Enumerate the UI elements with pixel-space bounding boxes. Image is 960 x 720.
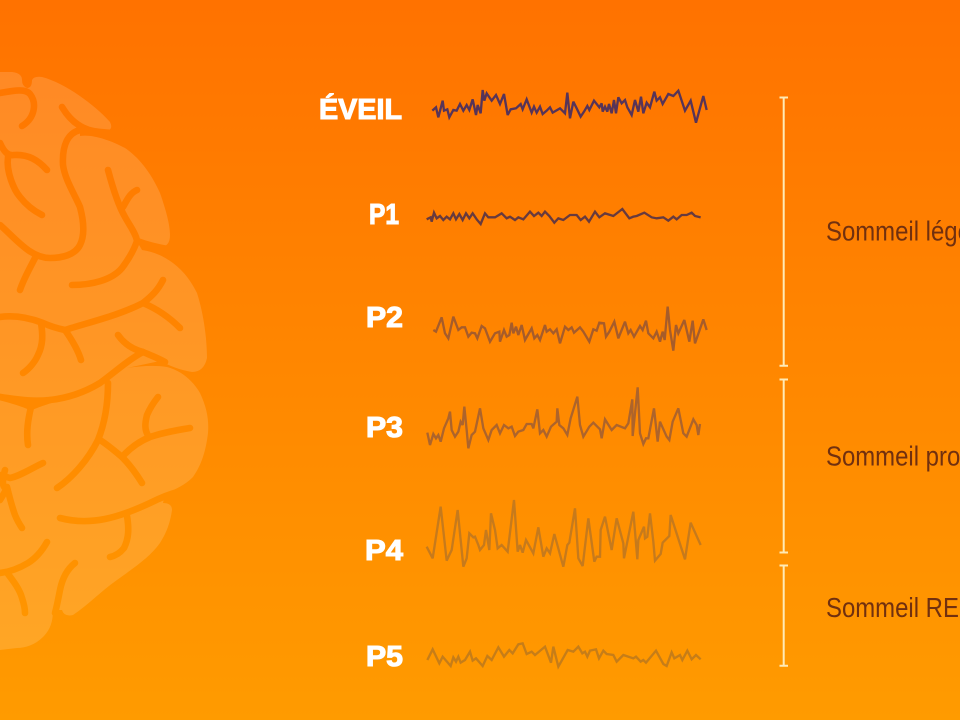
label: P1: P1	[369, 199, 399, 231]
waveform: ÉVEIL	[432, 90, 707, 123]
label: ÉVEIL: ÉVEIL	[319, 92, 402, 126]
waveform: P1	[427, 209, 701, 224]
waveform: P4	[427, 500, 701, 567]
bracket: deep sleep	[780, 380, 788, 552]
waveform: P5	[427, 643, 701, 667]
label: P3: P3	[366, 412, 403, 444]
waveform: P2	[433, 307, 707, 351]
icon: brain	[0, 72, 208, 650]
brain folds	[0, 90, 190, 613]
bracket: light sleep	[780, 98, 788, 366]
label: P5: P5	[366, 641, 403, 673]
bracket: REM sleep	[780, 566, 788, 666]
waveform: P3	[427, 387, 700, 448]
brain silhouette	[0, 72, 208, 650]
label: P4: P4	[365, 535, 403, 567]
label: P2: P2	[366, 302, 403, 334]
